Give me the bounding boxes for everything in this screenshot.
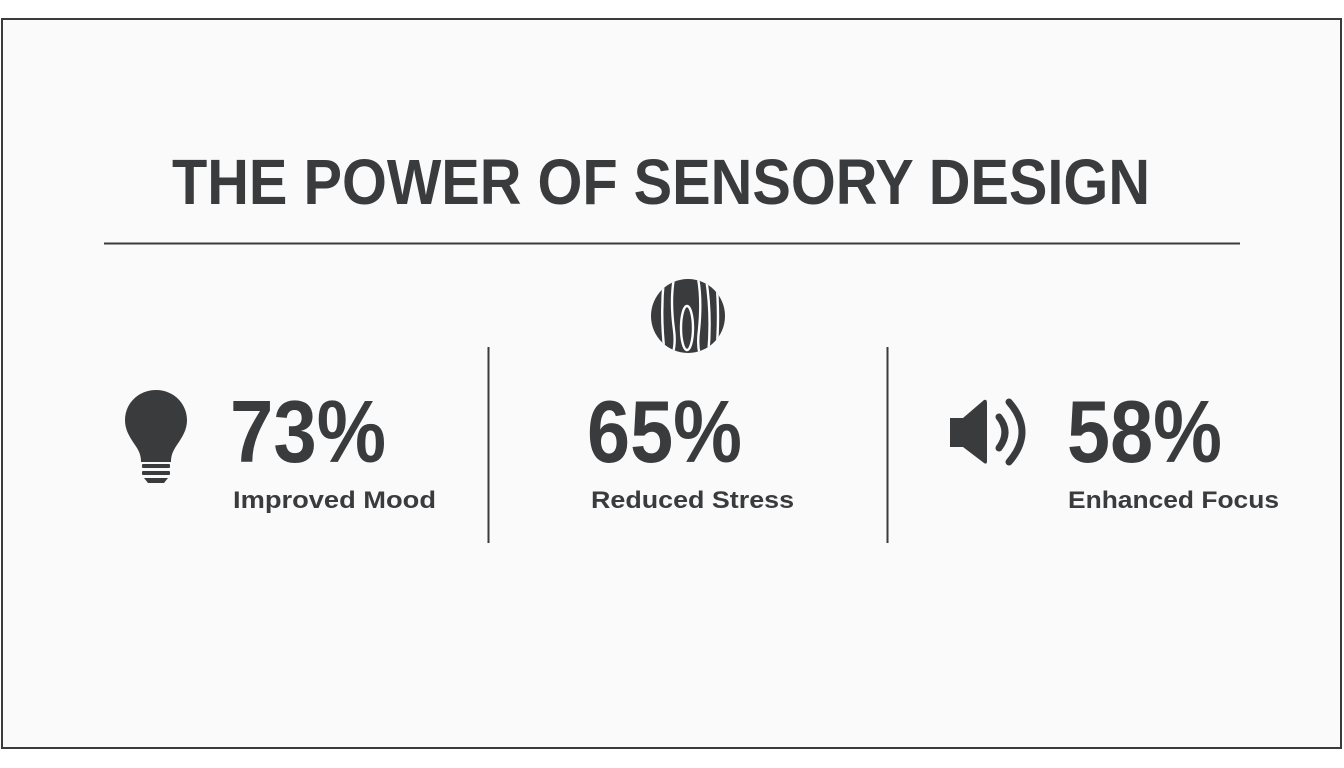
icon: wood texture <box>651 278 725 356</box>
divider left <box>488 347 490 543</box>
title: THE POWER OF SENSORY DESIGN <box>172 146 1150 218</box>
stat: improved mood: Improved Mood <box>233 487 436 514</box>
stat: reduced stress: Reduced Stress <box>591 487 794 514</box>
divider right <box>886 347 888 543</box>
icon: light bulb <box>125 390 187 483</box>
stat: enhanced focus: Enhanced Focus <box>1068 487 1279 514</box>
icon: speaker <box>950 400 1022 464</box>
stat: reduced stress <box>587 382 794 514</box>
stat: enhanced focus <box>950 382 1279 514</box>
stat: reduced stress: 65% <box>587 382 742 481</box>
stat: improved mood: 73% <box>230 382 386 481</box>
stat: enhanced focus: 58% <box>1067 382 1222 481</box>
stat: improved mood <box>125 382 436 514</box>
